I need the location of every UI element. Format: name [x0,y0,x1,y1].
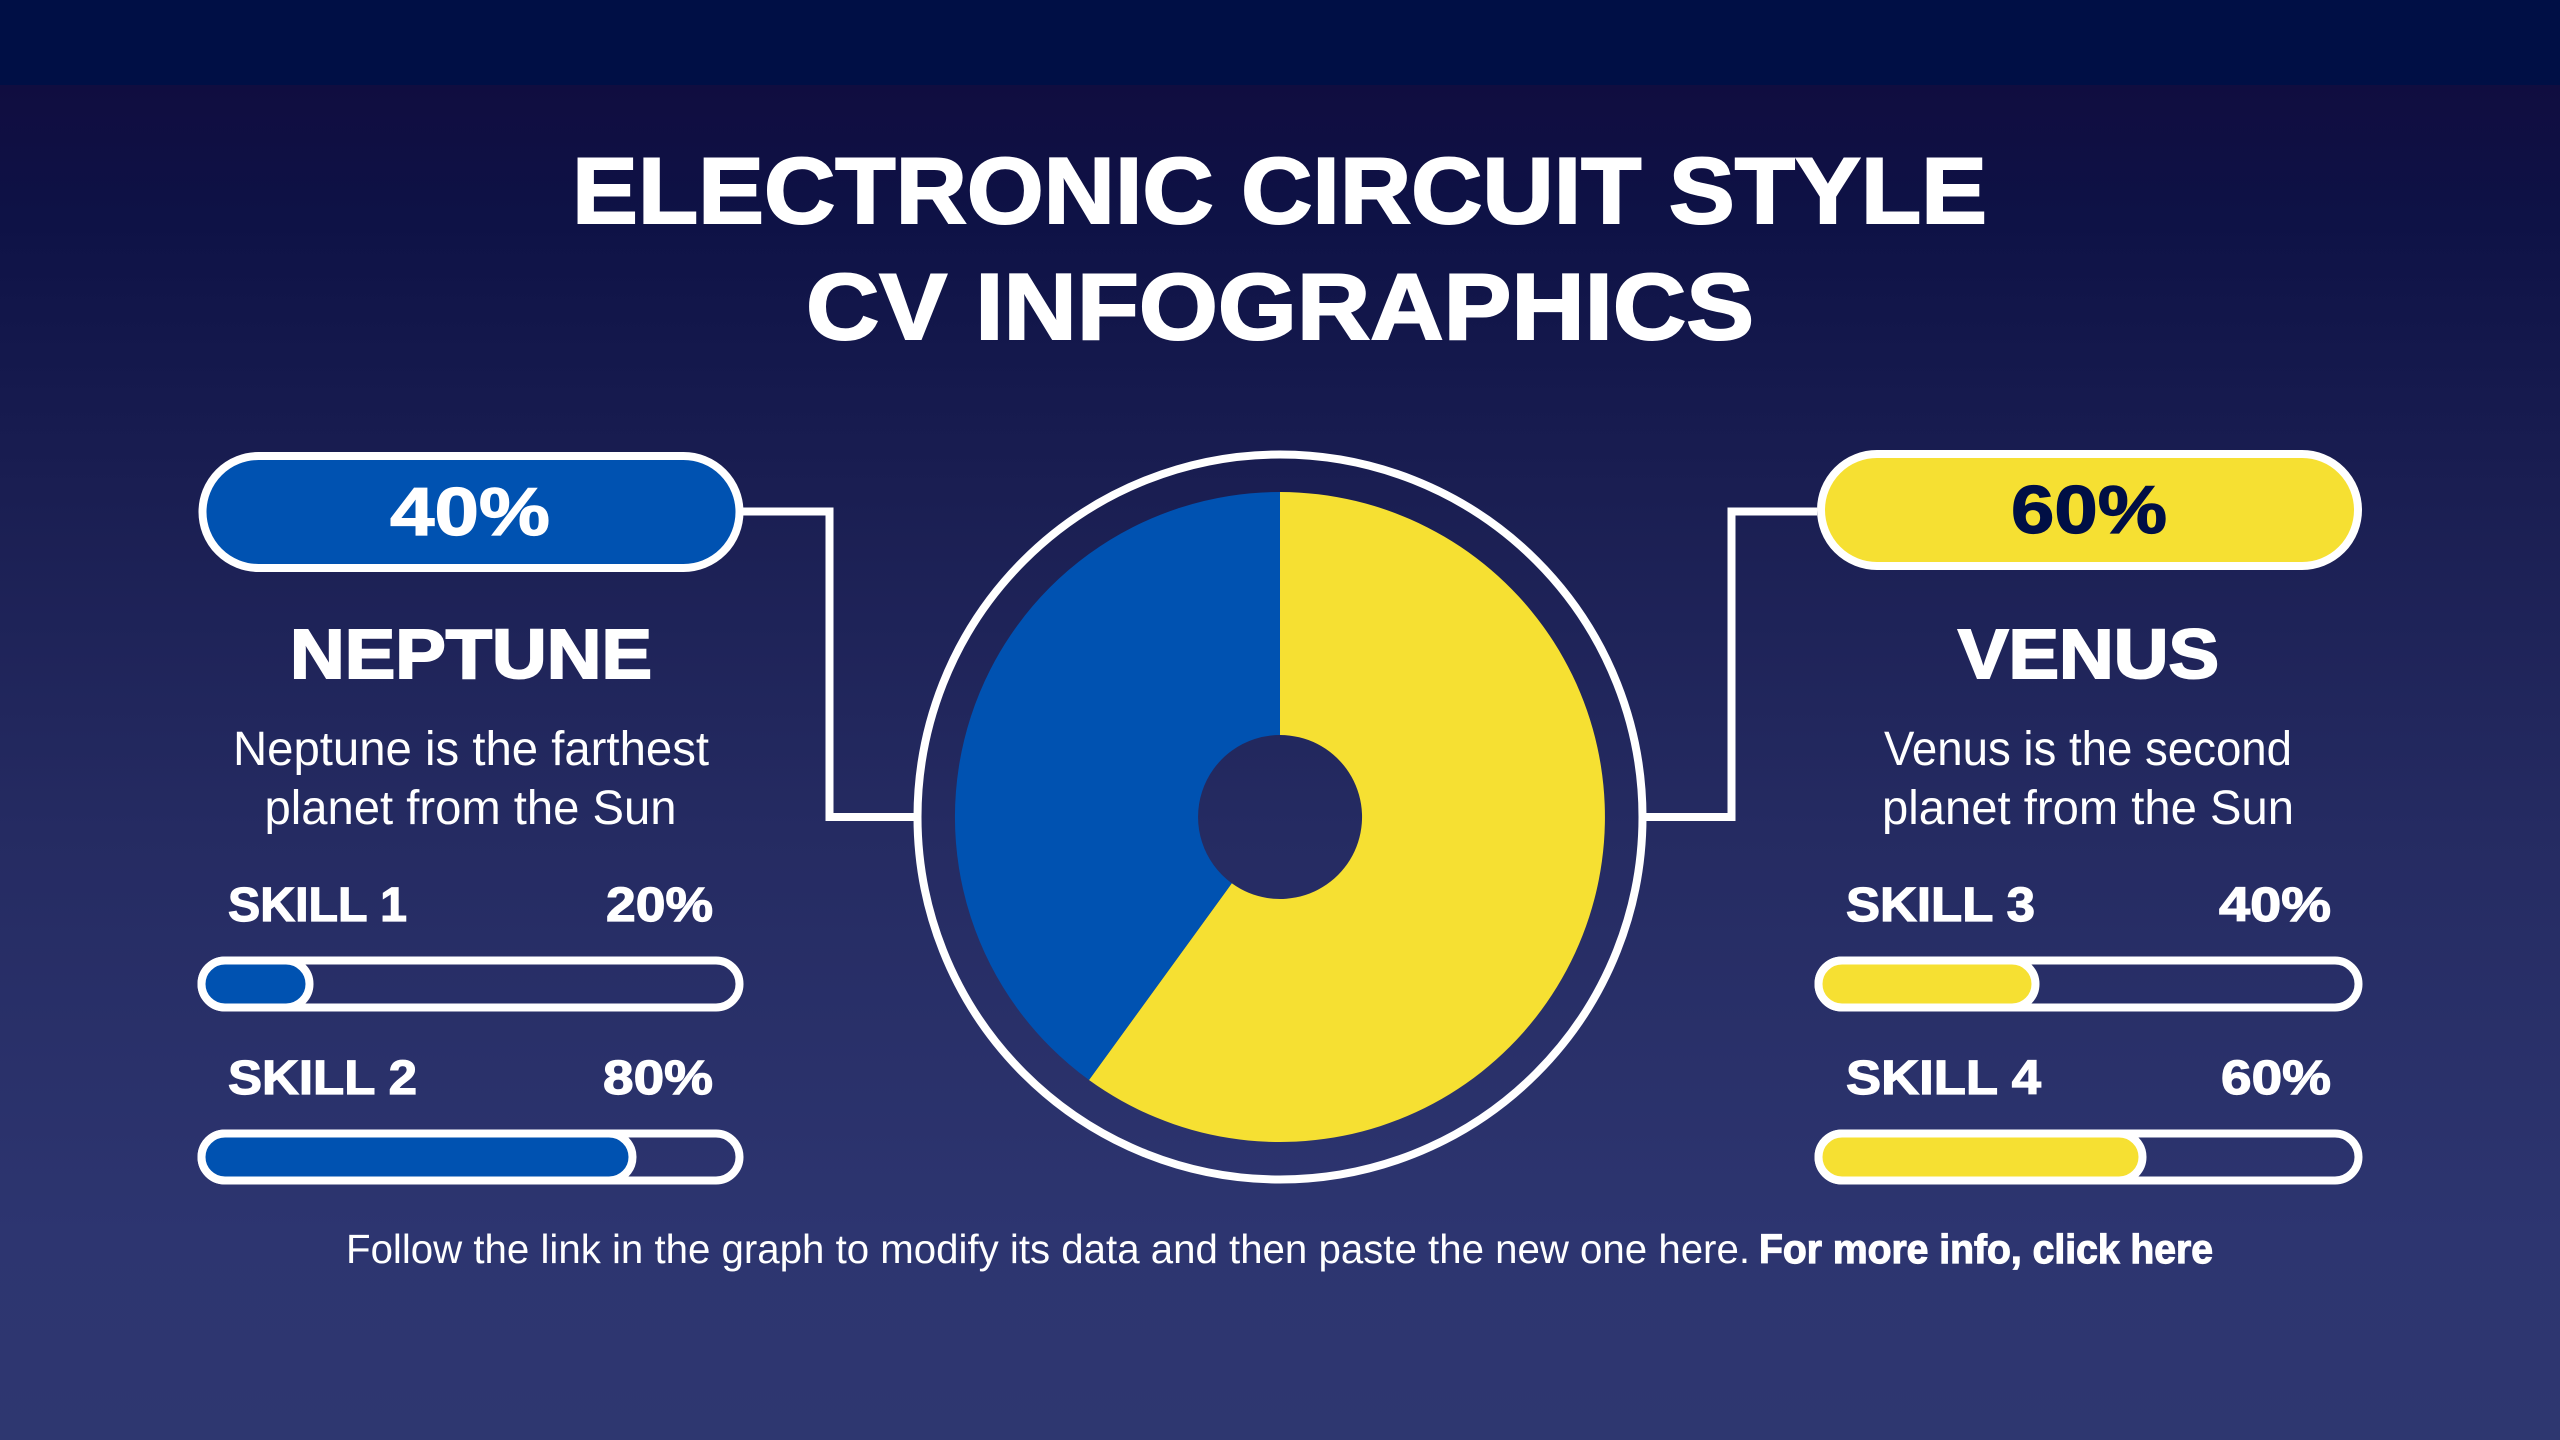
title: CV INFOGRAPHICS [806,254,1754,359]
Skill 2 label and value: 80% [603,1052,713,1105]
panel: Neptune [202,456,740,1180]
footer note: For more info, click here [1759,1226,2213,1272]
Skill 3 label and value: 40% [2219,879,2331,932]
panel: Venus [1818,454,2358,1180]
Skill 3 label and value [1846,879,2331,932]
Neptune description: Neptune is the farthest [233,723,709,776]
Venus heading: VENUS [1958,615,2219,693]
Venus description [1882,723,2294,835]
Skill 1 label and value: SKILL 1 [228,879,407,932]
Neptune percentage pill: 40% [390,474,550,550]
Skill 2 label and value: SKILL 2 [228,1052,417,1105]
Neptune description: planet from the Sun [264,782,676,835]
Venus percentage pill: 60% [2011,472,2167,548]
Neptune description [233,723,709,835]
Skill 1 progress bar [202,960,740,1008]
Neptune heading: NEPTUNE [290,615,652,693]
Venus description: Venus is the second [1884,723,2292,776]
connector: Venus to chart [1644,512,1817,817]
Skill 2 label and value [228,1052,713,1105]
footer note: Follow the link in the graph to modify its data and then paste the new one here. [346,1226,1750,1272]
Skill 4 label and value: SKILL 4 [1846,1052,2041,1105]
Skill 2 progress bar [202,1134,740,1180]
Venus percentage pill [1821,454,2358,566]
donut chart [918,454,1642,1180]
connector: Neptune to chart [743,512,916,817]
slice: Neptune 40% [955,492,1280,1080]
Venus description: planet from the Sun [1882,782,2294,835]
Skill 3 progress bar [1818,960,2358,1008]
Skill 1 label and value: 20% [606,879,713,932]
chart outer ring [918,454,1642,1180]
slice: Venus 60% [1089,492,1605,1142]
Skill 4 label and value: 60% [2221,1052,2331,1105]
title: ELECTRONIC CIRCUIT STYLE [572,138,1987,243]
Skill 1 label and value [228,879,713,932]
Skill 4 label and value [1846,1052,2331,1105]
Neptune percentage pill [202,456,740,568]
Skill 4 progress bar [1818,1134,2358,1180]
Skill 3 label and value: SKILL 3 [1846,879,2035,932]
title [572,138,1987,359]
